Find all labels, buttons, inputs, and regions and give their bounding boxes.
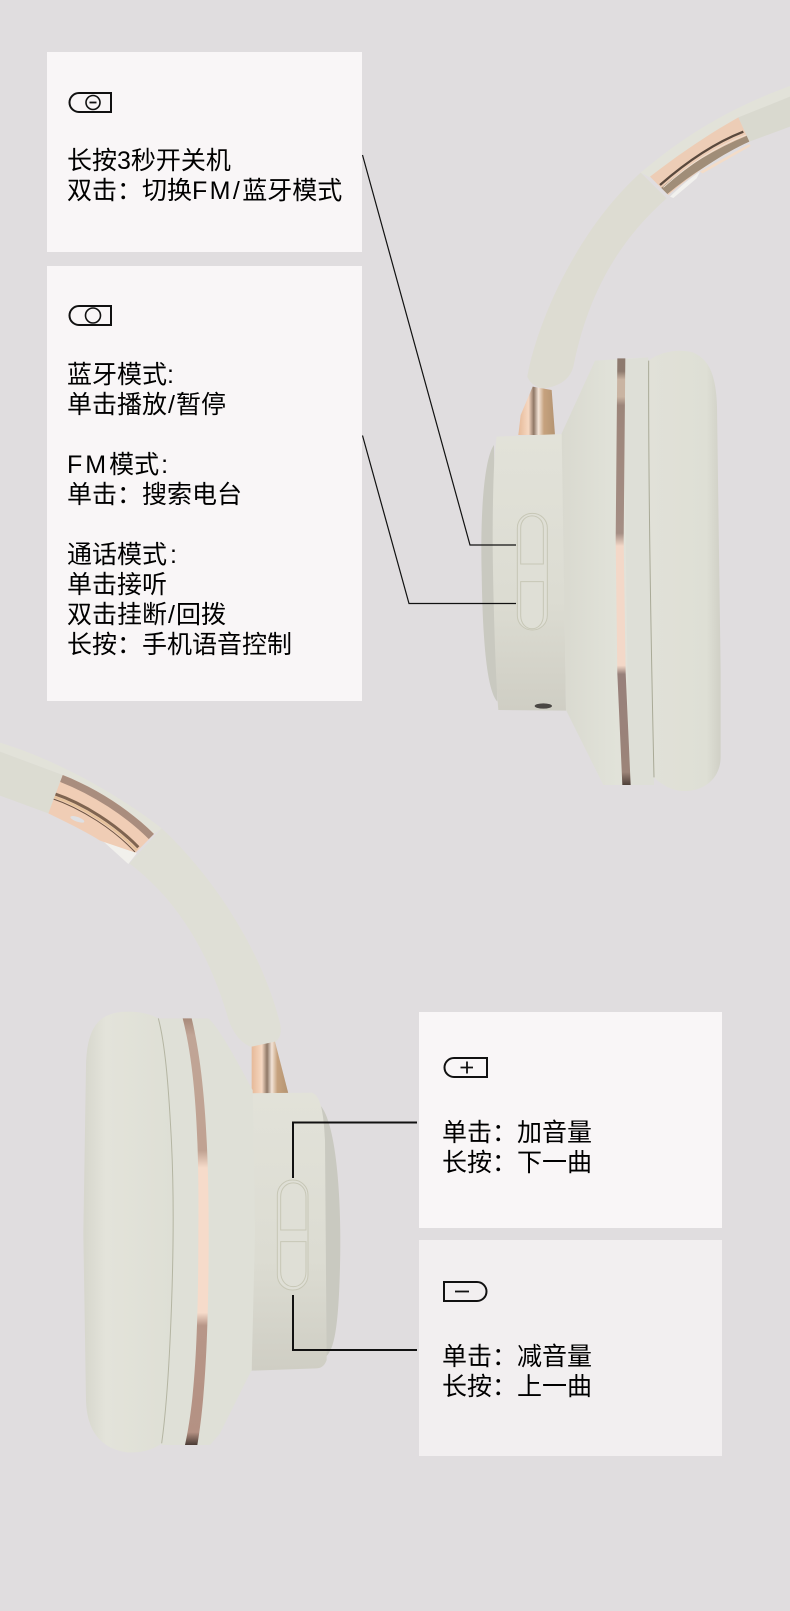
ear cushion [83,1012,173,1452]
text: power instructions: 长按3秒开关机 [67,147,231,175]
text: mode instructions: 单击接听 [67,570,167,598]
left headphone with headband [0,743,340,1452]
text: mode instructions [67,360,292,658]
panel: volume down button [419,1240,722,1456]
text: mode instructions: 单击播放/暂停 [67,390,226,418]
cone and ring [562,357,654,785]
ear cushion [649,351,721,791]
text: power instructions: 双击：切换FM/蓝牙模式 [67,177,342,205]
right ear cup [481,351,721,791]
icon: minus button [443,1281,488,1302]
text: volume down instructions: 长按：上一曲 [442,1373,592,1401]
side buttons [517,513,547,630]
outer grille [481,445,497,702]
text: power instructions [67,147,342,205]
panel: volume up button [419,1012,722,1228]
side buttons [277,1180,308,1290]
right headphone with headband [481,86,790,791]
stem [518,387,555,435]
headband, left view [0,743,281,1047]
text: mode instructions: 蓝牙模式: [67,360,174,388]
icon: circle button [68,305,112,326]
driver housing [248,1093,327,1371]
driver housing [493,434,566,711]
audio jack [535,703,552,709]
outer grille [320,1105,340,1358]
text: volume up instructions [442,1119,592,1177]
icon: power minus button [68,92,112,113]
headband, right view [527,86,790,388]
text: volume up instructions: 长按：下一曲 [442,1149,592,1177]
text: volume down instructions: 单击：减音量 [442,1343,592,1371]
cone and ring [158,1018,255,1445]
text: mode instructions: 长按：手机语音控制 [67,630,292,658]
text: volume down instructions [442,1343,592,1401]
panel: power button [47,52,362,252]
text: mode instructions: 双击挂断/回拨 [67,600,226,628]
metal stripe [183,1018,209,1445]
text: mode instructions: 单击：搜索电台 [67,480,242,508]
text: mode instructions: FM模式: [67,450,168,478]
panel: multifunction button [47,266,362,701]
metal stripe [616,358,631,785]
stem [252,1042,288,1093]
text: mode instructions: 通话模式: [67,540,177,568]
text: volume up instructions: 单击：加音量 [442,1119,592,1147]
left ear cup [83,1012,340,1452]
icon: plus button [444,1057,488,1078]
